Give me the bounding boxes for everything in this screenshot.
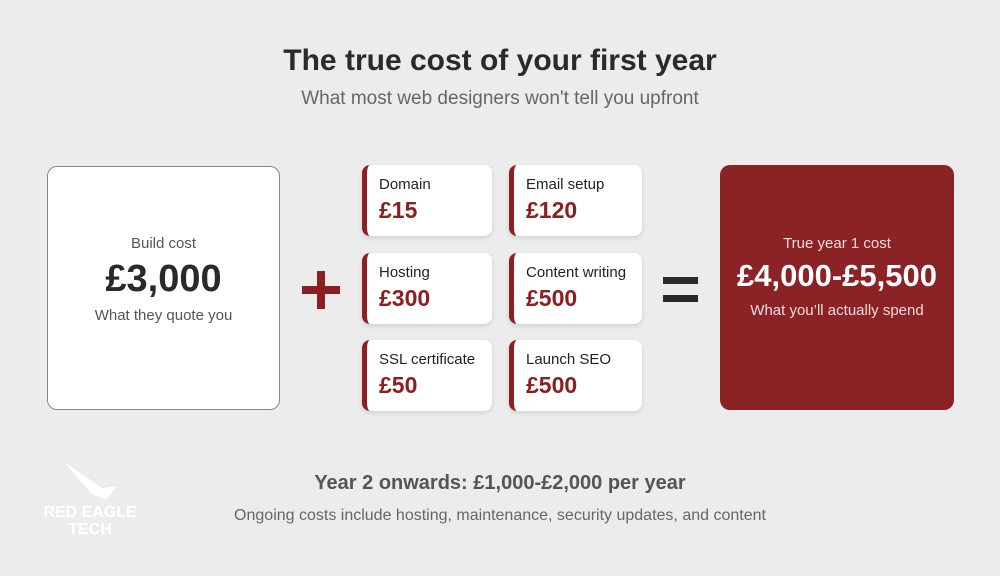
card: email	[509, 165, 642, 236]
panel: total	[720, 165, 954, 410]
card: hosting: £300	[379, 285, 430, 311]
footer text: Ongoing costs include hosting, maintenance, security updates, and content	[234, 507, 766, 524]
card: hosting	[362, 253, 492, 324]
card: seo	[509, 340, 642, 411]
card: content: Content writing	[526, 264, 626, 281]
card: email: Email setup	[526, 176, 604, 193]
panel: build cost: What they quote you	[95, 307, 232, 324]
panel: build cost	[47, 166, 280, 410]
footer heading: Year 2 onwards: £1,000-£2,000 per year	[314, 472, 686, 494]
card: ssl: £50	[379, 372, 417, 398]
panel: build cost: £3,000	[105, 258, 222, 300]
icon: plus	[302, 271, 340, 309]
card: ssl	[362, 340, 492, 411]
panel: total: What you’ll actually spend	[750, 302, 924, 319]
logo	[43, 462, 137, 538]
logo: RED EAGLE	[43, 504, 137, 521]
panel: total: £4,000-£5,500	[737, 258, 937, 293]
card: domain	[362, 165, 492, 236]
title: The true cost of your first year	[283, 44, 717, 77]
icon: equals	[663, 277, 698, 302]
card: email: £120	[526, 197, 577, 223]
card: domain: Domain	[379, 176, 431, 193]
subtitle: What most web designers won't tell you upfront	[301, 88, 699, 109]
card: seo: £500	[526, 372, 577, 398]
card: seo: Launch SEO	[526, 351, 611, 368]
logo: TECH	[68, 521, 112, 538]
card: content: £500	[526, 285, 577, 311]
card: ssl: SSL certificate	[379, 351, 475, 368]
card: hosting: Hosting	[379, 264, 430, 281]
panel: build cost: Build cost	[131, 235, 196, 252]
card: content	[509, 253, 642, 324]
panel: additional costs	[360, 165, 644, 414]
card: domain: £15	[379, 197, 417, 223]
panel: total: True year 1 cost	[783, 235, 891, 252]
